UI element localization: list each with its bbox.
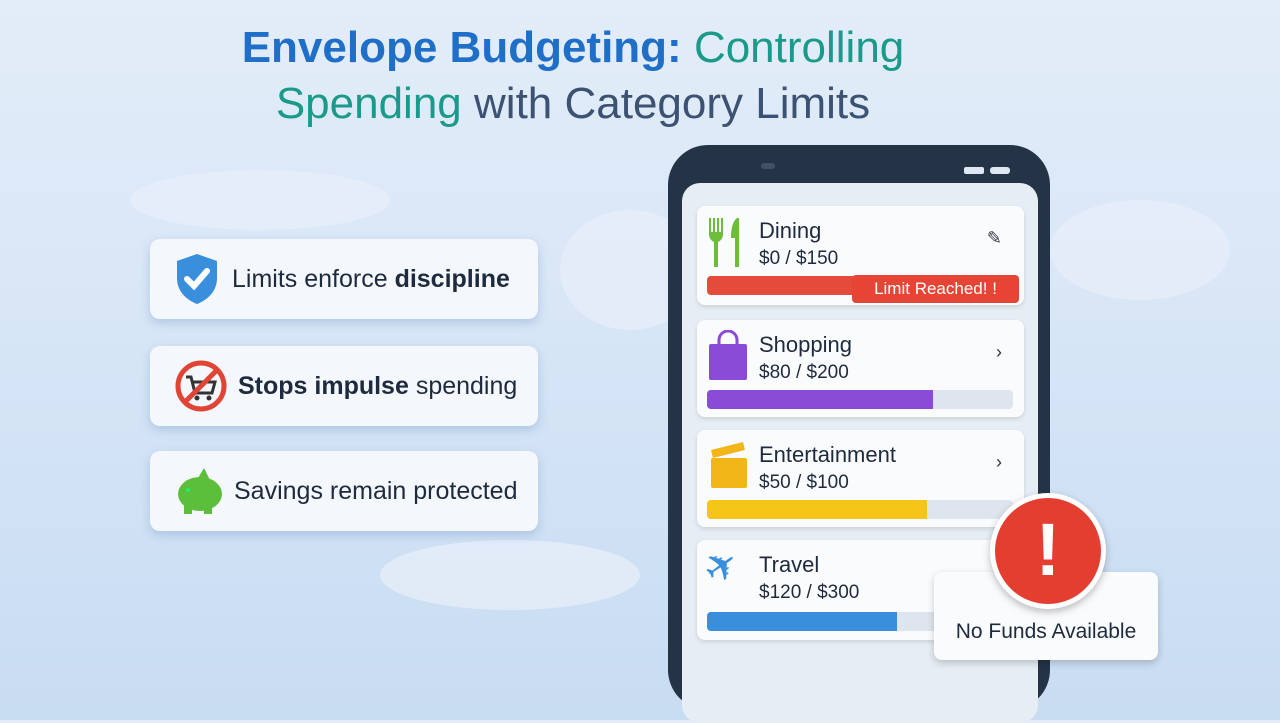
callout: no funds (934, 572, 1158, 660)
card: shopping: $80 / $200 (759, 362, 849, 383)
title (242, 23, 904, 128)
feature: impulse: Stops impulse spending (238, 372, 517, 400)
card: travel: $120 / $300 (759, 582, 859, 603)
icon: alert (990, 493, 1106, 609)
card: entertainment: Entertainment (759, 442, 896, 467)
card: dining: $0 / $150 (759, 248, 838, 269)
callout: no funds: No Funds Available (956, 620, 1136, 643)
feature: savings: Savings remain protected (234, 476, 517, 504)
card: entertainment (697, 430, 1024, 527)
icon: alert: ! (1036, 508, 1060, 591)
card: entertainment: $50 / $100 (759, 472, 849, 493)
title: Envelope Budgeting: Controlling (242, 23, 904, 72)
feature: discipline (150, 239, 538, 319)
card: entertainment: › (996, 452, 1002, 472)
card: dining: ✎ (987, 228, 1002, 248)
feature: discipline: Limits enforce discipline (232, 264, 510, 292)
card: dining: Limit Reached! ! (874, 279, 997, 298)
card: travel: ✈ (695, 539, 748, 595)
feature: impulse (150, 346, 538, 426)
card: dining: Dining (759, 218, 821, 243)
card: dining (697, 206, 1024, 305)
feature: savings (150, 451, 538, 531)
card: shopping (697, 320, 1024, 417)
title: Spending with Category Limits (276, 79, 870, 128)
phone (668, 145, 1050, 710)
card: travel (697, 540, 1024, 640)
card: travel: Travel (759, 552, 819, 577)
card: shopping: Shopping (759, 332, 852, 357)
card: shopping: › (996, 342, 1002, 362)
